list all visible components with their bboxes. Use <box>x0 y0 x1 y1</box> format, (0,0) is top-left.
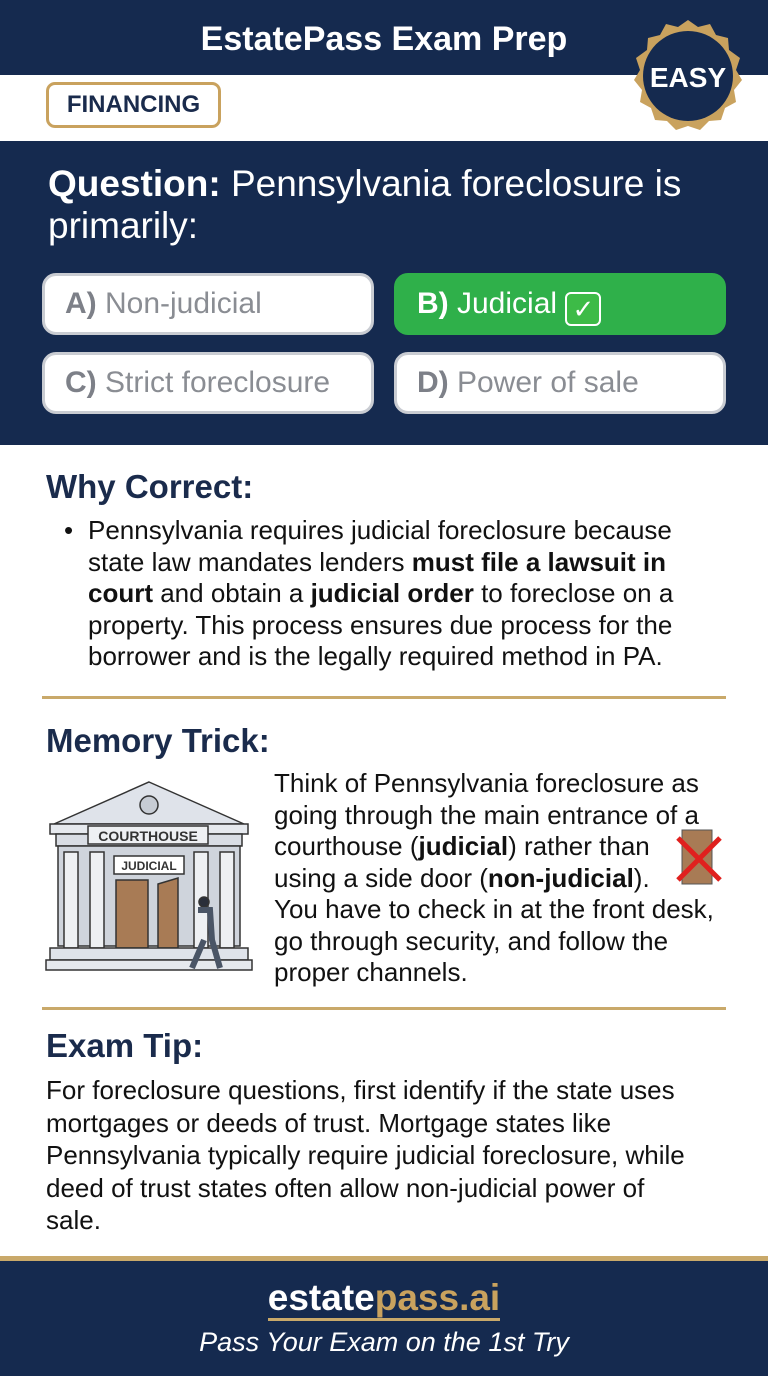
memory trick text: courthouse (judicial) rather than <box>274 831 650 861</box>
option A: A) Non-judicial <box>65 287 262 320</box>
explanation text: property. This process ensures due process for the <box>88 610 672 640</box>
explanation text: • <box>64 515 73 545</box>
category tag: FINANCING <box>67 91 200 118</box>
memory trick text <box>274 768 714 987</box>
badge: EASY <box>634 20 742 130</box>
icon: courthouse: JUDICIAL <box>121 859 177 873</box>
explanation text: state law mandates lenders must file a lawsuit in <box>88 546 666 576</box>
explanation text: borrower and is the legally required method in PA. <box>88 641 663 671</box>
question panel <box>0 141 768 445</box>
memory trick text: going through the main entrance of a <box>274 800 699 830</box>
option C: C) Strict foreclosure <box>65 366 330 399</box>
icon: courthouse <box>45 781 253 971</box>
memory trick text: You have to check in at the front desk, <box>274 894 714 924</box>
option C <box>42 352 374 414</box>
exam tip text <box>46 1075 685 1235</box>
explanation text: court and obtain a judicial order to foreclose on a <box>88 578 673 608</box>
exam tip text: sale. <box>46 1205 101 1235</box>
option B correct <box>394 273 726 335</box>
header band <box>0 0 768 75</box>
footer <box>0 1256 768 1376</box>
heading: why correct: Why Correct: <box>46 468 253 505</box>
heading: memory trick: Memory Trick: <box>46 722 270 759</box>
memory trick text: proper channels. <box>274 957 468 987</box>
title: EstatePass Exam Prep <box>201 20 567 58</box>
exam tip text: Pennsylvania typically require judicial foreclosure, while <box>46 1140 685 1170</box>
option B correct: ✓ <box>572 294 594 324</box>
memory trick text: Think of Pennsylvania foreclosure as <box>274 768 699 798</box>
footer tagline: Pass Your Exam on the 1st Try <box>199 1327 569 1357</box>
memory trick text: go through security, and follow the <box>274 926 668 956</box>
exam tip text: For foreclosure questions, first identify if the state uses <box>46 1075 675 1105</box>
explanation text: Pennsylvania requires judicial foreclosure because <box>88 515 672 545</box>
explanation text <box>64 515 674 671</box>
exam tip text: deed of trust states often allow non-judicial power of <box>46 1172 644 1202</box>
category tag <box>46 82 221 128</box>
option D <box>394 352 726 414</box>
option D: D) Power of sale <box>417 366 639 399</box>
footer brand: estatepass.ai <box>268 1277 500 1318</box>
badge: EASY: EASY <box>650 62 726 93</box>
exam tip text: mortgages or deeds of trust. Mortgage states like <box>46 1108 611 1138</box>
icon: courthouse: COURTHOUSE <box>98 828 198 844</box>
option B correct: B) Judicial <box>417 287 557 320</box>
heading: exam tip: Exam Tip: <box>46 1027 203 1064</box>
option A <box>42 273 374 335</box>
question text: Question: Pennsylvania foreclosure is primarily: <box>48 163 681 246</box>
icon: crossed door <box>676 830 722 884</box>
memory trick text: using a side door (non-judicial). <box>274 862 650 892</box>
